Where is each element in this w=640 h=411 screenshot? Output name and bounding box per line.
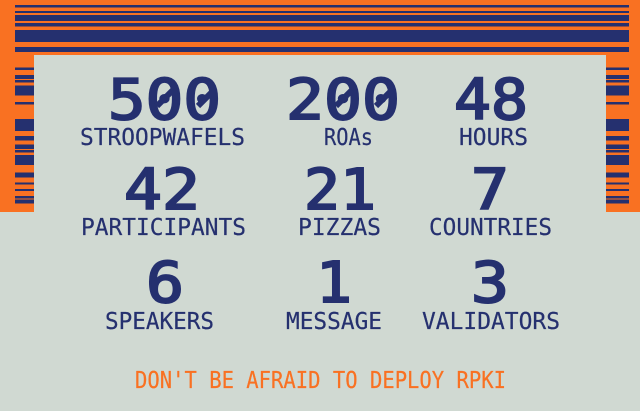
orange background band: [0, 0, 640, 212]
stat: 21 pizzas: PIZZAS: [298, 215, 381, 241]
central panel: [34, 55, 606, 411]
stat: 500 stroopwafels: [80, 68, 245, 151]
stat: 200 ROAs: 200: [286, 68, 400, 133]
stat: 42 participants: PARTICIPANTS: [81, 215, 246, 241]
stat: 48 hours: HOURS: [459, 125, 528, 151]
stat: 21 pizzas: [298, 158, 381, 241]
stat: 7 countries: COUNTRIES: [429, 215, 552, 241]
stat: 3 validators: [422, 251, 560, 335]
stat: 6 speakers: SPEAKERS: [105, 309, 214, 335]
barcode stripes: [15, 5, 629, 204]
stat: 500 stroopwafels: STROOPWAFELS: [80, 125, 245, 151]
stat: 42 participants: 42: [124, 158, 200, 223]
stat: 6 speakers: 6: [146, 251, 184, 316]
stat: 3 validators: 3: [471, 251, 509, 316]
stat: 42 participants: [81, 158, 246, 241]
stat: 1 message: MESSAGE: [286, 309, 382, 335]
stat: 7 countries: [429, 158, 552, 241]
stat: 200 ROAs: [286, 68, 400, 151]
stat: 1 message: [286, 251, 382, 335]
stat: 6 speakers: [105, 251, 214, 335]
stat: 48 hours: 48: [454, 68, 528, 133]
stat: 7 countries: 7: [471, 158, 509, 223]
stat: 3 validators: VALIDATORS: [422, 309, 560, 335]
stat: 500 stroopwafels: 500: [108, 68, 221, 133]
stat: 1 message: 1: [316, 251, 352, 316]
tagline: DON'T BE AFRAID TO DEPLOY RPKI: [135, 368, 506, 394]
stat: 21 pizzas: 21: [304, 158, 376, 223]
stat: 200 ROAs: ROAs: [324, 125, 373, 151]
